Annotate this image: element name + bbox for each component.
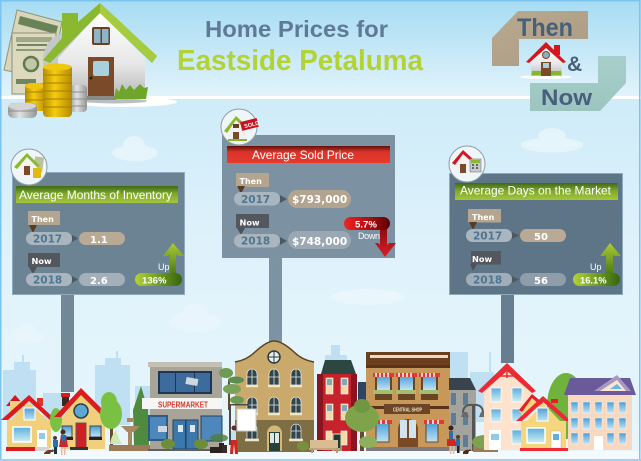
house body (43, 3, 177, 107)
then row: Then (240, 177, 262, 186)
then row: Then (472, 213, 495, 222)
up arrow (163, 243, 184, 274)
dollar bills (4, 10, 62, 94)
now banner (530, 56, 626, 111)
heading: Average Days on the Market (460, 184, 612, 198)
then row: 2017 (241, 194, 270, 206)
then row: Then (32, 215, 54, 224)
up label: Up (590, 262, 602, 272)
clouds (8, 128, 583, 343)
now row: 56 (534, 276, 548, 287)
change pill (135, 273, 182, 286)
central shop sign: CENTRAL SHOP (393, 408, 422, 414)
change pill: 5.7% (355, 220, 377, 230)
change pill: 16.1% (580, 274, 607, 286)
now row (26, 253, 125, 287)
purple apartment building (564, 375, 636, 450)
bench and street tree (297, 440, 340, 453)
then row: 2017 (473, 230, 502, 242)
supermarket (142, 362, 222, 451)
icon: inventory badge (11, 149, 47, 185)
then label: Then (517, 14, 573, 42)
then row: $793,000 (292, 194, 347, 206)
supermarket sign: SUPERMARKET (158, 400, 209, 410)
small yellow house left (1, 395, 56, 451)
down arrow (375, 228, 396, 257)
now row: 2018 (33, 274, 62, 286)
up label: Up (158, 262, 170, 272)
now row: Now (32, 256, 52, 266)
title: Home Prices for (205, 16, 388, 42)
heading (227, 146, 390, 163)
tree and hanging sign (219, 368, 256, 445)
panel: average sold price (222, 135, 396, 258)
change pill (344, 217, 390, 230)
small house icon (520, 42, 572, 79)
then and now logo (492, 11, 626, 111)
ampersand: & (567, 53, 582, 76)
then banner (492, 11, 588, 66)
central shop (366, 352, 450, 451)
now row: $748,000 (292, 236, 347, 248)
white hanging board (237, 409, 256, 431)
change pill (573, 273, 620, 286)
street of buildings (1, 341, 636, 455)
walker with child (447, 426, 498, 454)
ground strip (0, 451, 641, 460)
now row: 2.6 (90, 276, 108, 287)
sign poles (61, 258, 514, 392)
panel: average days on the market (450, 174, 622, 294)
now row: 2018 (473, 274, 502, 286)
now row (234, 214, 351, 249)
street tree (345, 399, 379, 451)
now row: Now (240, 218, 260, 228)
now row: 2018 (241, 236, 270, 248)
title: Eastside Petaluma (177, 45, 424, 77)
now label: Now (541, 85, 593, 110)
peach house (478, 363, 536, 450)
tan stone building (235, 341, 314, 452)
up arrow (600, 243, 621, 274)
heading: Average Months of Inventory (19, 188, 172, 202)
skyline (3, 345, 494, 425)
now row (466, 251, 566, 287)
coin stacks (8, 64, 87, 118)
grey building and street lamp (449, 378, 487, 451)
then row (26, 211, 125, 246)
then row: 2017 (33, 234, 62, 246)
green tree behind (547, 373, 585, 439)
then row: 50 (534, 232, 548, 243)
yellow house right (516, 394, 571, 451)
then row (466, 209, 566, 243)
then row: 1.1 (90, 235, 108, 246)
down label: Down (358, 231, 380, 241)
yellow house with round window (50, 388, 110, 450)
red brick building (317, 360, 366, 451)
dog walker (210, 426, 238, 454)
now row: Now (472, 254, 492, 264)
change pill: 136% (142, 276, 167, 286)
green trees and fountain (100, 386, 150, 451)
then row (234, 173, 351, 208)
icon: days badge (449, 146, 485, 182)
illustration: house with money (4, 3, 177, 118)
panel: average months of inventory (12, 172, 184, 294)
heading: Average Sold Price (252, 148, 354, 162)
people and dog left (44, 430, 68, 455)
title (177, 16, 424, 77)
icon: sold badge (221, 109, 260, 145)
icon: sold badge: SOLD (244, 121, 260, 130)
